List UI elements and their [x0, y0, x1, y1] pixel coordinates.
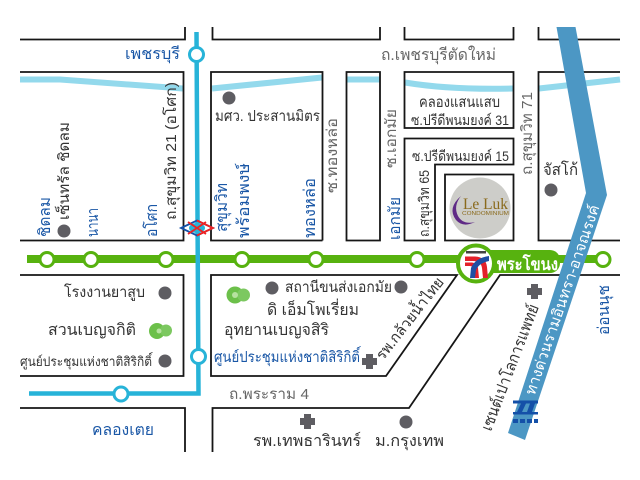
road and place labels: ซ.ปรีดีพนมยงค์ 31: [411, 112, 509, 128]
road and place labels: เอกมัย: [387, 197, 404, 240]
road and place labels: มศว. ประสานมิตร: [215, 108, 320, 125]
blue MRT line: [29, 32, 206, 401]
road and place labels: ชิดลม: [37, 197, 54, 237]
road and place labels: คลองแสนแสบ: [419, 94, 500, 111]
road and place labels: นานา: [85, 208, 102, 237]
road and place labels: เซ็นทรัล ชิดลม: [54, 122, 73, 220]
road and place labels: ถ.พระราม 4: [229, 386, 309, 403]
green BTS line: [27, 252, 610, 266]
road and place labels: รพ.กล้วยน้ำไทย: [370, 272, 448, 363]
road and place labels: ถ.เพชรบุรีตัดใหม่: [381, 45, 496, 65]
road and place labels: จัสโก้: [543, 160, 578, 179]
road and place labels: อโศก: [142, 204, 161, 237]
icon: Le Luk condominium logo: Le Luk: [463, 196, 508, 213]
road and place labels: ทองหล่อ: [302, 178, 319, 238]
icon: station label pill: [480, 250, 560, 274]
icon: port authority logo: [513, 400, 538, 423]
road and place labels: ศูนย์ประชุมแห่งชาติสิริกิติ์: [20, 352, 154, 370]
road and place labels: โรงงานยาสูบ: [64, 283, 145, 301]
road and place labels: ม.กรุงเทพ: [375, 433, 444, 451]
road and place labels: ศูนย์ประชุมแห่งชาติสิริกิติ์: [214, 346, 362, 367]
icon: Le Luk condominium logo: [450, 178, 510, 238]
road and place labels: อ่อนนุช: [596, 285, 614, 335]
icon: station label pill: พระโขนง: [497, 254, 558, 274]
road and place labels: สถานีขนส่งเอกมัย: [285, 279, 392, 296]
road and place labels: [20, 45, 614, 451]
road and place labels: พร้อมพงษ์: [234, 163, 253, 238]
road and place labels: ซ.ปรีดีพนมยงค์ 15: [412, 148, 509, 164]
icon: Le Luk condominium logo: CONDOMINIUM: [462, 211, 509, 217]
road and place labels: เซนต์เปาโลการแพทย์: [477, 302, 543, 433]
icon: BTS logo: [458, 246, 494, 282]
road and place labels: อุทยานเบญจสิริ: [224, 322, 329, 340]
road and place labels: รพ.เทพธารินทร์: [253, 431, 361, 450]
road and place labels: สุขุมวิท: [214, 183, 232, 232]
road and place labels: ซ.เอกมัย: [383, 109, 400, 168]
landmark dots: [58, 92, 558, 428]
icon: MRT station diamond: [181, 220, 213, 236]
road and place labels: ซ.ทองหล่อ: [324, 118, 341, 193]
canals: [20, 78, 620, 89]
road and place labels: ดิ เอ็มโพเรี่ยม: [267, 298, 359, 319]
road and place labels: สวนเบญจกิติ: [48, 322, 136, 339]
expressway: ทางด่วนรามอินทรา-อาจณรงค์: [522, 203, 603, 397]
park icons: [149, 286, 250, 339]
road and place labels: เพชรบุรี: [125, 45, 180, 64]
road and place labels: ถ.สุขุมวิท 71: [519, 92, 537, 175]
road and place labels: คลองเตย: [92, 422, 154, 439]
hospital crosses: [300, 284, 542, 429]
road and place labels: ถ.สุขุมวิท 65: [416, 170, 433, 237]
expressway: [508, 27, 607, 440]
road and place labels: ถ.สุขุมวิท 21 (อโศก): [162, 82, 181, 220]
